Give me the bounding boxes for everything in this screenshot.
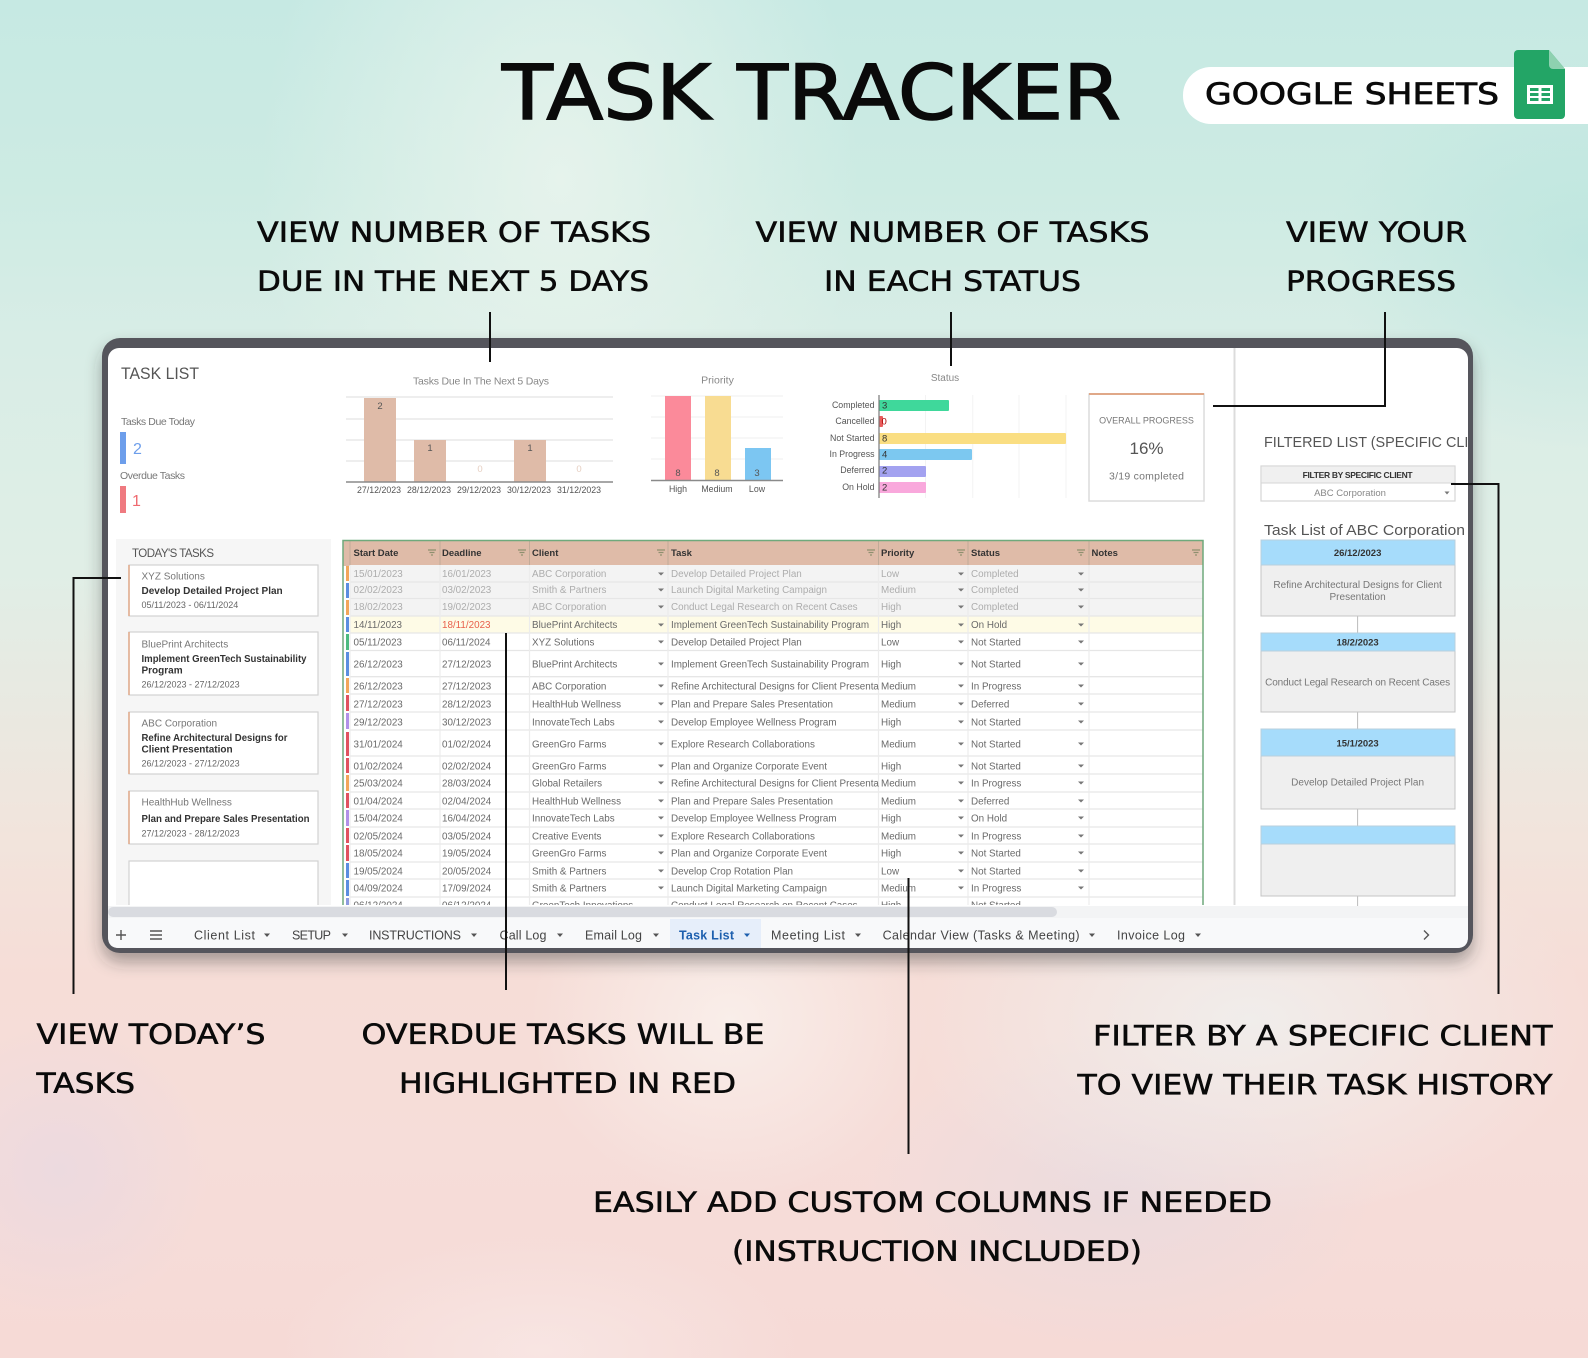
sheet tabs bar: Task List [679,928,735,942]
bar chart: priority: Low [749,484,766,494]
table header: Deadline [442,548,482,559]
callout: next 5 days: DUE IN THE NEXT 5 DAYS [257,264,649,298]
row 6: Not Started [971,660,1021,670]
row 13: Plan and Prepare Sales Presentation [671,796,833,808]
task card 4 [129,791,318,844]
panel: filtered list [1260,436,1468,906]
row 19 partial [354,901,1020,905]
bar chart: tasks due: 31/12/2023 [557,485,601,495]
row 12: In Progress [971,778,1021,790]
row 9: 29/12/2023 [354,718,403,728]
row 6: 26/12/2023 [354,660,403,670]
row 1: ABC Corporation [532,569,606,580]
row 17: Not Started [971,866,1021,878]
callout: filter by client [1076,1019,1554,1101]
bar chart: tasks due: Tasks Due In The Next 5 Days [413,376,549,388]
row 13 [354,797,1009,806]
row 18: Launch Digital Marketing Campaign [671,884,827,894]
row 8: 27/12/2023 [354,700,403,710]
row 10: 31/01/2024 [354,740,403,750]
sheet tabs bar: Email Log [585,928,642,942]
bar chart: tasks due: 29/12/2023 [457,485,501,495]
row 11: Plan and Organize Corporate Event [671,762,827,772]
callout: next 5 days [257,216,651,298]
row 2: Launch Digital Marketing Campaign [671,585,827,596]
task card 3: ABC Corporation [142,718,217,730]
task card 1: 05/11/2023 - 06/11/2024 [142,600,238,610]
title: TASK TRACKER [501,48,1121,137]
kpi: overall progress: OVERALL PROGRESS [1099,416,1194,426]
row 12: Global Retailers [532,778,602,790]
row 3 [354,602,1018,612]
bar chart: priority: 8 [675,468,681,479]
row 16: GreenGro Farms [532,848,606,860]
row 7: 26/12/2023 [354,682,403,692]
task card 1 [129,565,318,616]
sheet tabs bar: Invoice Log [1117,928,1185,942]
row 14: 16/04/2024 [442,814,492,824]
bar chart: priority: 3 [754,468,760,479]
task card 2: 26/12/2023 - 27/12/2023 [142,680,240,690]
row 13: 02/04/2024 [442,796,492,808]
row 18 [354,884,1021,894]
row 2: 02/02/2023 [354,585,403,596]
filter control: FILTER BY SPECIFIC CLIENT [1303,470,1413,480]
row 6: Implement GreenTech Sustainability Program [671,660,869,670]
row 13: Medium [881,796,916,808]
row 9 [354,718,1020,728]
bar chart: tasks due: 1 [427,443,433,454]
row 6: High [881,660,901,670]
bar chart: priority: Medium [701,484,733,494]
row status strips [346,566,349,908]
row 18: 17/09/2024 [442,884,492,894]
row 19 partial: 06/12/2024 [354,900,403,912]
arrow: filter by client [1451,484,1498,994]
row 8 [354,700,1009,710]
callout: each status [756,216,1150,298]
callout: custom columns: (INSTRUCTION INCLUDED) [732,1234,1142,1268]
row 12: Medium [881,778,916,790]
row 3: Completed [971,602,1019,613]
filtered card 2: 18/2/2023 [1336,638,1379,648]
callout: filter by client: FILTER BY A SPECIFIC CLIENT [1093,1019,1554,1052]
table border [343,540,1203,905]
callout: todays tasks: VIEW TODAY’S [36,1018,266,1050]
row 7: Refine Architectural Designs for Client Presenta [671,682,879,692]
bar chart: status: Completed [832,400,875,410]
row 6 [354,660,1020,670]
row 2 [354,586,1018,595]
window frame [102,338,1473,953]
kpi: overall progress: 16% [1129,439,1164,458]
row 13: HealthHub Wellness [532,796,621,808]
row 5: Not Started [971,638,1021,648]
row 16: Plan and Organize Corporate Event [671,848,827,860]
row 3: High [881,602,901,613]
row 15: 03/05/2024 [442,832,492,842]
row 16: High [881,848,901,860]
filtered card 2 [1261,633,1455,712]
sheet tabs bar: Calendar View (Tasks & Meeting) [883,928,1080,942]
callout: each status: VIEW NUMBER OF TASKS [756,216,1150,248]
row 8: Plan and Prepare Sales Presentation [671,700,833,710]
kpi: overdue tasks: Overdue Tasks [120,470,185,482]
table header: Task [671,548,693,559]
callout: your progress: VIEW YOUR [1286,216,1467,248]
filtered card 1 [1261,540,1455,616]
filter control: ABC Corporation [1314,488,1386,499]
row 17: Develop Crop Rotation Plan [671,866,793,878]
bar chart: tasks due: 0 [477,464,483,475]
row 4 overdue: 18/11/2023 [442,620,491,631]
row 3: 18/02/2023 [354,602,403,613]
task card 2: Implement GreenTech Sustainability [142,654,307,665]
panel: filtered list: Task List of ABC Corporation [1264,522,1465,539]
task card 1: XYZ Solutions [142,572,205,582]
table header: Start Date [354,548,398,559]
row 1: Completed [971,569,1019,580]
right divider [1234,348,1236,905]
table header [343,540,1203,566]
filtered card 2: Conduct Legal Research on Recent Cases [1265,678,1450,688]
row 8: Deferred [971,700,1009,710]
panel: filtered list: FILTERED LIST (SPECIFIC CLIENT) [1264,434,1502,451]
arrow: custom columns [908,878,910,1154]
callout: custom columns: EASILY ADD CUSTOM COLUMNS IF NEEDED [593,1186,1272,1218]
callout: each status: IN EACH STATUS [824,264,1081,298]
row 4 overdue: Implement GreenTech Sustainability Program [671,620,869,631]
row 1 [354,570,1018,579]
bar chart: status: 4 [882,450,887,460]
filtered card 3: 15/1/2023 [1336,738,1379,750]
row 17: 20/05/2024 [442,866,492,878]
row 14: High [881,814,901,824]
row 18: Smith & Partners [532,884,606,894]
task card 3 [129,712,318,774]
icon: google sheets [1514,50,1565,119]
bar chart: status: 2 [882,482,887,494]
row 11 [354,762,1020,772]
row 15: In Progress [971,832,1021,842]
row 17 [354,867,1020,876]
filtered card 1: Refine Architectural Designs for Client [1273,580,1442,591]
bar chart: tasks due: 28/12/2023 [407,485,451,495]
task card 4: HealthHub Wellness [142,798,232,808]
table header: Status [971,548,1000,559]
bar chart: status: 3 [882,400,887,412]
row 17: Smith & Partners [532,866,606,878]
kpi: tasks due today: 2 [133,441,142,458]
row 1: Develop Detailed Project Plan [671,569,802,580]
kpi: overdue tasks [120,470,185,513]
arrow: next 5 days [489,312,491,362]
row 10: Explore Research Collaborations [671,740,815,750]
sheet tabs bar [108,906,1468,948]
arrow: each status [950,312,952,366]
row 5: 06/11/2024 [442,638,491,648]
task card 2 [129,632,318,695]
arrow: todays tasks [74,578,121,994]
badge: google sheets [1183,50,1588,124]
row 16: 19/05/2024 [442,848,492,860]
row 3: ABC Corporation [532,602,606,613]
row 4 overdue: BluePrint Architects [532,620,617,631]
row 4 overdue: High [881,620,901,631]
bar chart: status: 0 [882,416,887,428]
callout: overdue tasks [362,1018,764,1100]
row 5: 05/11/2023 [354,638,403,648]
bar chart: priority: 8 [714,468,720,479]
row 19 partial: High [881,900,901,912]
row 14: Develop Employee Wellness Program [671,814,837,824]
row 9: Develop Employee Wellness Program [671,718,837,728]
row 14 [354,814,1006,824]
row 10: GreenGro Farms [532,740,606,750]
row 3: 19/02/2023 [442,602,492,613]
row 11: High [881,762,901,772]
bar chart: status: Cancelled [835,416,875,426]
kpi: overdue tasks: 1 [132,493,141,510]
task card 4: Plan and Prepare Sales Presentation [142,814,310,825]
bar chart: tasks due: 27/12/2023 [357,485,401,495]
row 7: Medium [881,682,916,692]
row 1: 15/01/2023 [354,569,403,580]
table: task list [343,540,1203,912]
row 19 partial: 06/12/2024 [442,900,492,912]
bar chart: tasks due: 2 [377,401,383,412]
callout: overdue tasks: HIGHLIGHTED IN RED [399,1066,736,1100]
row 10: Not Started [971,740,1021,750]
table header: Client [532,548,559,559]
task card 3: 26/12/2023 - 27/12/2023 [142,758,240,768]
row 11: GreenGro Farms [532,762,606,772]
task card 3: Client Presentation [142,744,233,756]
row 4 overdue: On Hold [971,620,1007,631]
arrow: overdue [505,633,507,990]
filter control [1261,466,1455,501]
row 9: Not Started [971,718,1021,728]
bar chart: tasks due: 30/12/2023 [507,485,551,495]
task card 5 empty [128,860,318,905]
kpi: tasks due today [120,416,196,464]
row 7: 27/12/2023 [442,682,492,692]
page heading: TASK LIST [121,364,199,383]
row 7: ABC Corporation [532,682,606,692]
row 18: 04/09/2024 [354,884,403,894]
row 19 partial: Conduct Legal Research on Recent Cases [671,900,858,912]
row 12: Refine Architectural Designs for Client Presenta [671,778,879,790]
row 4 overdue: 14/11/2023 [354,620,403,631]
panel: todays tasks [116,539,331,921]
row 6: BluePrint Architects [532,660,617,670]
callout: custom columns [593,1186,1272,1268]
row 5: XYZ Solutions [532,638,594,648]
row 12: 25/03/2024 [354,778,403,790]
row 10 [354,740,1020,750]
row 5: Low [881,638,900,648]
spreadsheet window [102,338,1502,953]
row 14: 15/04/2024 [354,814,403,824]
bar chart: priority [651,374,783,494]
task card 2: BluePrint Architects [142,640,228,650]
row 18: Medium [881,884,916,894]
row 15 [354,832,1021,842]
row 9: High [881,718,901,728]
task card 4: 27/12/2023 - 28/12/2023 [142,828,240,838]
dropdown arrows [658,572,1084,890]
row 8: 28/12/2023 [442,700,492,710]
row 16: Not Started [971,848,1021,860]
row 6: 27/12/2023 [442,660,492,670]
filtered card 4 empty [1261,826,1455,896]
bar chart: status [830,373,1066,498]
bar chart: tasks due [346,376,613,495]
task card 2: Program [142,666,183,676]
task card 3: Refine Architectural Designs for [142,733,288,744]
row 11: 01/02/2024 [354,762,403,772]
callout: your progress: PROGRESS [1286,264,1456,298]
row 8: HealthHub Wellness [532,700,621,710]
row 16 [354,849,1020,858]
row 13: 01/04/2024 [354,796,403,808]
bar chart: status: On Hold [842,482,875,492]
row 12 [354,779,1021,788]
filtered card 3 [1261,729,1455,809]
bar chart: priority: High [669,484,687,494]
row 15: Creative Events [532,832,602,842]
callout: filter by client: TO VIEW THEIR TASK HISTORY [1076,1068,1554,1101]
row 18: In Progress [971,884,1021,894]
bar chart: priority: Priority [701,374,735,386]
bar chart: status: Deferred [840,465,875,475]
row 4 overdue [354,620,1006,630]
row 12: 28/03/2024 [442,778,492,790]
row 8: Medium [881,700,916,710]
row 1: Low [881,569,900,580]
panel: todays tasks: TODAY'S TASKS [132,548,214,560]
row 15: 02/05/2024 [354,832,403,842]
row 9: 30/12/2023 [442,718,492,728]
row 7 [354,682,1021,692]
bar chart: tasks due: 1 [527,443,533,454]
table rows [346,565,1203,912]
filtered card 3: Develop Detailed Project Plan [1291,778,1424,788]
kpi: overall progress: 3/19 completed [1109,470,1184,482]
row 10: 01/02/2024 [442,740,492,750]
sheet tabs bar: Call Log [500,928,547,942]
table header: Notes [1092,548,1118,559]
filtered card 1: Presentation [1330,592,1386,603]
row 19 partial: GreenTech Innovations [532,900,633,912]
row 9: InnovateTech Labs [532,718,615,728]
row 2: Medium [881,585,916,596]
bar chart: tasks due: 0 [576,464,582,475]
row 13: Deferred [971,796,1009,808]
row 5 [354,638,1020,648]
row 3: Conduct Legal Research on Recent Cases [671,602,858,613]
row 5: Develop Detailed Project Plan [671,638,802,648]
sheet tabs bar: INSTRUCTIONS [369,928,461,942]
row 2: 03/02/2023 [442,585,492,596]
row 2: Completed [971,585,1019,596]
filtered card 1: 26/12/2023 [1334,548,1381,559]
bar chart: status: 8 [882,434,887,444]
row 15: Explore Research Collaborations [671,832,815,842]
sheet tabs bar: Meeting List [771,928,846,942]
kpi: tasks due today: Tasks Due Today [121,416,196,428]
row 14: On Hold [971,814,1007,824]
row 10: Medium [881,740,916,750]
badge: google sheets: GOOGLE SHEETS [1205,77,1499,111]
task card 1: Develop Detailed Project Plan [142,586,283,597]
callout: next 5 days: VIEW NUMBER OF TASKS [257,216,651,248]
row 17: 19/05/2024 [354,866,403,878]
callout: todays tasks [35,1018,266,1100]
callout: todays tasks: TASKS [35,1066,135,1100]
callout: your progress [1286,216,1467,298]
row 11: Not Started [971,762,1021,772]
sheet tabs bar: Client List [194,928,256,942]
table header: Priority [881,548,915,559]
kpi: overall progress [1089,393,1204,501]
row 2: Smith & Partners [532,585,606,596]
row 11: 02/02/2024 [442,762,492,772]
bar chart: status: 2 [882,466,887,476]
row 16: 18/05/2024 [354,848,403,860]
bar chart: status: Not Started [830,433,875,443]
row 19 partial: Not Started [971,900,1021,912]
row 17: Low [881,866,900,878]
bar chart: status: In Progress [830,449,875,459]
row 15: Medium [881,832,916,842]
callout: overdue tasks: OVERDUE TASKS WILL BE [362,1018,764,1050]
sheet tabs bar: SETUP [292,928,331,942]
arrow: progress [1213,312,1385,406]
row 1: 16/01/2023 [442,569,492,580]
row 14: InnovateTech Labs [532,814,615,824]
row 7: In Progress [971,682,1021,692]
bar chart: status: Status [931,373,959,384]
